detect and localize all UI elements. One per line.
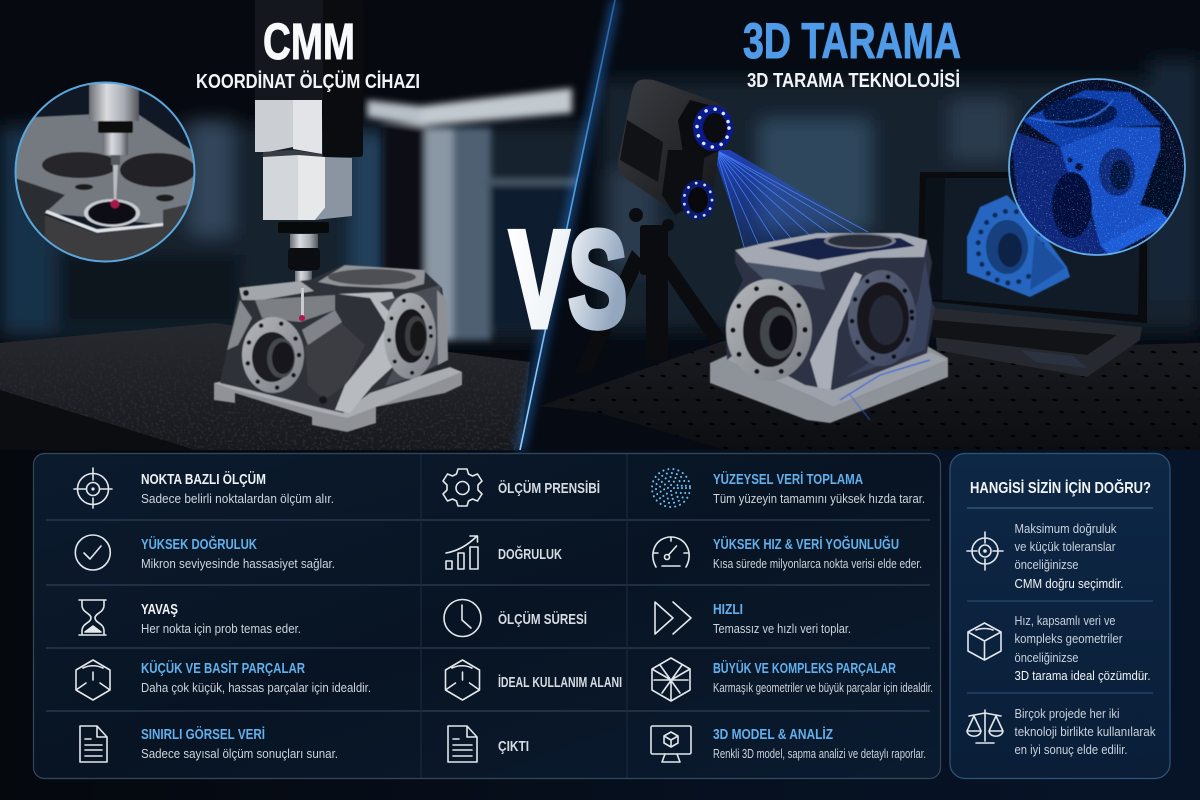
advice: CMM: önceliğinizse (1014, 557, 1078, 572)
row 5: output: 3D MODEL & ANALİZ (713, 726, 833, 743)
icon: cube outline (446, 660, 480, 700)
row 4: use area: BÜYÜK VE KOMPLEKS PARÇALAR (713, 660, 896, 677)
table (0, 323, 530, 450)
icon: check (75, 535, 110, 570)
icon: mesh cube (652, 658, 690, 701)
row 2: accuracy (75, 535, 922, 571)
row 3: time: HIZLI (713, 602, 743, 618)
advice: both: teknoloji birlikte kullanılarak (1014, 724, 1156, 739)
panel: which is right for you (950, 454, 1170, 778)
icon: target (74, 468, 112, 508)
title: CMM: KOORDİNAT ÖLÇÜM CİHAZI (196, 70, 420, 93)
engine block: scan side (710, 233, 948, 423)
row 3: time: ÖLÇÜM SÜRESİ (498, 611, 587, 628)
table (540, 340, 1200, 450)
row 1: point-based measurement: Sadece belirli noktalardan ölçüm alır. (141, 492, 334, 506)
inset: probe close-up (15, 83, 196, 263)
laptop (917, 172, 1147, 377)
row 2: accuracy: DOĞRULUK (498, 545, 562, 563)
inset ring: probe (16, 82, 194, 262)
scanner beam (712, 150, 870, 250)
row 4: use area (76, 658, 933, 701)
probe stylus and tip (299, 288, 305, 321)
tripod (600, 208, 724, 340)
3D scanner (618, 79, 733, 220)
row 3: time: Her nokta için prob temas eder. (141, 622, 301, 636)
advice: 3D scanning (968, 613, 1150, 683)
row 1: point-based measurement: YÜZEYSEL VERİ TOPLAMA (713, 471, 863, 488)
icon: document (80, 726, 107, 762)
advice: CMM: ve küçük toleranslar (1014, 539, 1116, 554)
row 2: accuracy: YÜKSEK HIZ & VERİ YOĞUNLUĞU (713, 535, 899, 553)
VS mark: VS (510, 203, 627, 355)
row 2: accuracy: Kısa sürede milyonlarca nokta verisi elde eder. (713, 557, 922, 571)
advice: both (967, 706, 1156, 757)
engine block: CMM side (214, 265, 462, 432)
advice: 3D scanning: kompleks geometriler (1014, 631, 1123, 646)
advice: 3D scanning: önceliğinizse (1014, 650, 1078, 665)
title: 3D scanning: 3D TARAMA TEKNOLOJİSİ (747, 69, 960, 92)
icon: gear (443, 469, 482, 506)
panel heading: HANGİSİ SİZİN İÇİN DOĞRU? (970, 479, 1151, 497)
icon: hourglass (79, 600, 106, 635)
panel: comparison table (34, 454, 940, 778)
scanner ring: upper (693, 105, 733, 151)
row 4: use area: Daha çok küçük, hassas parçalar için idealdir. (141, 681, 371, 695)
icon: cube (76, 660, 110, 700)
CMM arm (255, 0, 363, 288)
icon: fast forward (655, 602, 691, 634)
inset ring: point cloud (1009, 79, 1185, 255)
left scene: CMM (0, 0, 620, 450)
advice: CMM: CMM doğru seçimdir. (1014, 576, 1124, 591)
row 1: point-based measurement (74, 468, 925, 508)
row 3: time: YAVAŞ (141, 602, 178, 618)
title: CMM: CMM (263, 13, 355, 70)
row 5: output (80, 726, 926, 762)
title: 3D scanning (743, 13, 961, 92)
right scene: 3D scanning (510, 0, 1200, 450)
row 3: time (79, 600, 851, 636)
row 1: point-based measurement: Tüm yüzeyin tamamını yüksek hızda tarar. (713, 492, 925, 506)
title: 3D scanning: 3D TARAMA (743, 13, 961, 69)
row 4: use area: Karmaşık geometriler ve büyük parçalar için idealdir. (713, 681, 933, 695)
icon: document outline (448, 726, 477, 762)
row 1: point-based measurement: ÖLÇÜM PRENSİBİ (498, 480, 600, 497)
advice: 3D scanning: Hız, kapsamlı veri ve (1014, 613, 1116, 628)
advice: both: en iyi sonuç elde edilir. (1014, 742, 1128, 757)
row 5: output: ÇIKTI (498, 739, 529, 755)
row 5: output: Sadece sayısal ölçüm sonuçları sunar. (141, 747, 338, 761)
row 2: accuracy: YÜKSEK DOĞRULUK (141, 535, 257, 553)
icon: dot sphere (652, 469, 690, 507)
advice: CMM: Maksimum doğruluk (1014, 521, 1117, 536)
row 4: use area: KÜÇÜK VE BASİT PARÇALAR (141, 660, 305, 677)
scanner ring: lower (681, 180, 715, 220)
row 5: output: Renkli 3D model, sapma analizi ve detaylı raporlar. (713, 747, 926, 761)
row 2: accuracy: Mikron seviyesinde hassasiyet sağlar. (141, 557, 335, 571)
inset: point cloud (1008, 79, 1186, 257)
laptop screen model (967, 195, 1070, 297)
icon: target (967, 532, 1003, 570)
row 4: use area: İDEAL KULLANIM ALANI (498, 674, 622, 691)
icon: scales (967, 710, 1003, 743)
advice: CMM (967, 521, 1124, 591)
title: CMM (196, 13, 420, 93)
row 5: output: SINIRLI GÖRSEL VERİ (141, 726, 265, 743)
icon: clock (444, 600, 481, 636)
icon: chart (446, 536, 478, 569)
divider glow line (520, 0, 615, 450)
advice: 3D scanning: 3D tarama ideal çözümdür. (1014, 668, 1150, 683)
icon: monitor (651, 726, 691, 762)
row 3: time: Temassız ve hızlı veri toplar. (713, 622, 851, 636)
blurred lab background (600, 60, 1200, 330)
row 1: point-based measurement: NOKTA BAZLI ÖLÇÜM (141, 471, 266, 488)
advice: both: Birçok projede her iki (1014, 706, 1120, 721)
icon: cube (968, 623, 1001, 660)
icon: gauge (653, 537, 689, 567)
blurred factory background (0, 120, 620, 340)
